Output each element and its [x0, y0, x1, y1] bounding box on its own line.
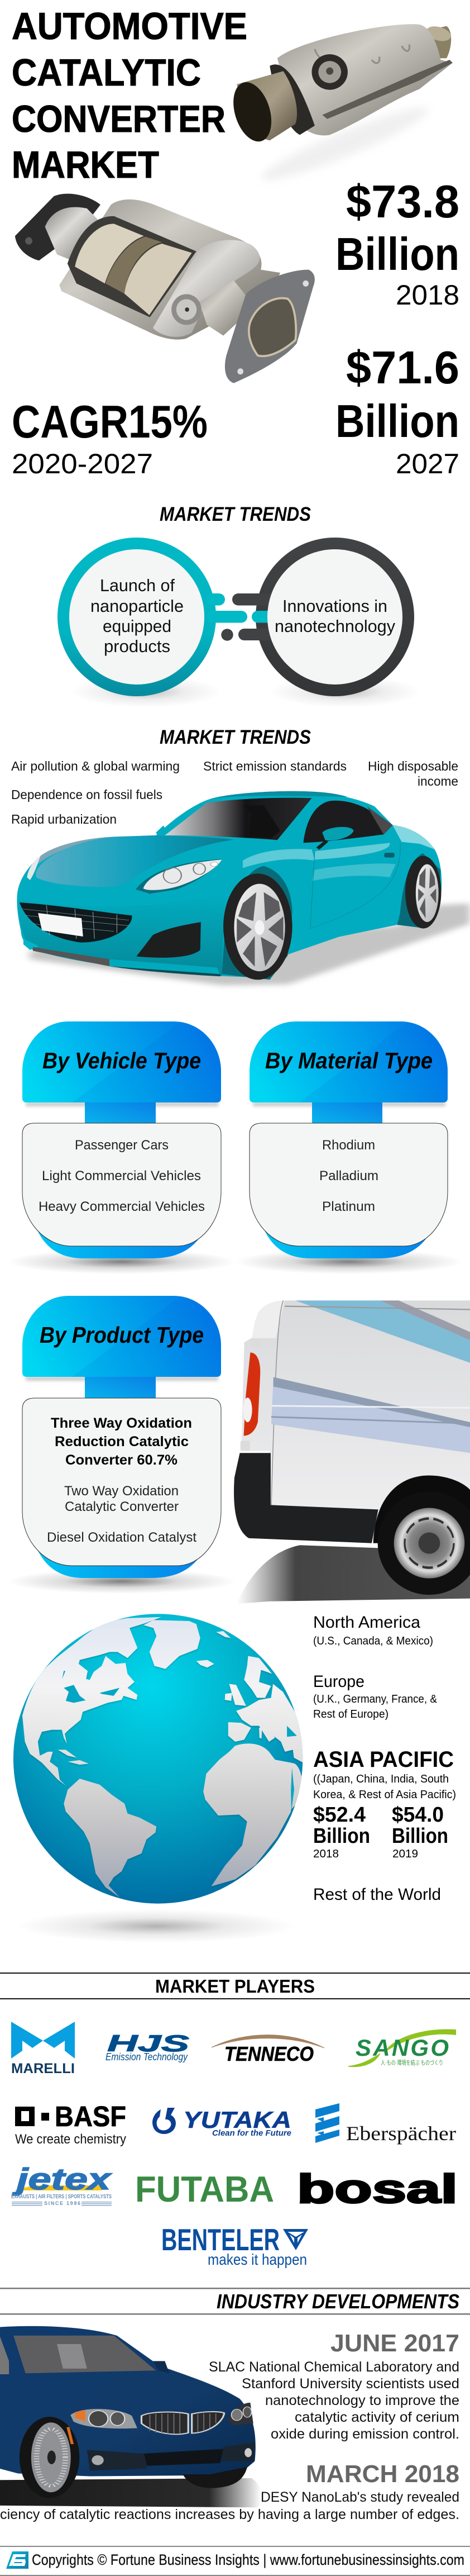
legend: asia pacific: Billion: [392, 1824, 448, 1848]
text: June 2017 development: oxide during emission control.: [271, 2426, 459, 2442]
list: vehicle types: Passenger Cars: [75, 1138, 169, 1153]
legend: asia pacific: 2019: [392, 1848, 418, 1860]
image: catalytic converter, top right: [227, 24, 453, 190]
list: drivers: Strict emission standards: [203, 759, 347, 773]
list: drivers: [11, 759, 458, 826]
logo: Futaba: FUTABA: [135, 2169, 274, 2209]
logo: BASF: BASF: [55, 2100, 126, 2132]
logo: Benteler: [161, 2222, 308, 2268]
text: June 2017 development: nanotechnology to improve the: [265, 2393, 459, 2408]
stat: 2027 market size: [335, 341, 459, 479]
list: other products: [47, 1484, 196, 1545]
logo: HJS: Emission Technology: [105, 2051, 188, 2062]
logo: BASF: We create chemistry: [15, 2132, 126, 2147]
legend: asia pacific: Korea, & Rest of Asia Pacific): [313, 1789, 456, 1801]
legend: asia pacific: ((Japan, China, India, South: [313, 1773, 449, 1785]
text: June 2017 development: SLAC National Chemical Laboratory and: [209, 2359, 459, 2375]
text: left circle: products: [104, 636, 170, 656]
stat: CAGR: 2020-2027: [12, 448, 153, 479]
list: drivers: Dependence on fossil fuels: [11, 787, 162, 802]
list: materials: Palladium: [319, 1168, 378, 1184]
text: leading product share: Three Way Oxidation: [51, 1415, 192, 1431]
legend: asia pacific: Billion: [313, 1824, 370, 1848]
legend: europe: Europe: [313, 1672, 365, 1691]
stat: 2027 market size: $71.6: [346, 341, 459, 393]
text: March 2018 development: DESY NanoLab's study revealed: [261, 2489, 459, 2505]
list: materials: Rhodium: [322, 1138, 375, 1153]
legend: asia pacific: 2018: [313, 1848, 339, 1860]
panel: by product type: [7, 1296, 236, 1594]
text: June 2017 development: Stanford University scientists used: [242, 2376, 459, 2392]
legend: north america: [313, 1613, 433, 1647]
logo: Benteler: BENTELER: [161, 2222, 280, 2257]
stat: CAGR: [12, 396, 208, 479]
logo: Jetex: [11, 2162, 112, 2206]
legend: europe: [313, 1672, 438, 1720]
text: June 2017 development: catalytic activity of cerium: [295, 2409, 459, 2425]
logo: Eberspacher: [315, 2103, 456, 2145]
icon: Fortune Business Insights mark: [6, 2551, 28, 2569]
text: leading product share: Converter 60.7%: [65, 1452, 178, 1468]
logo: Bosal: bosal: [297, 2167, 458, 2212]
illustration: globe: [13, 1614, 305, 1943]
legend: europe: Rest of Europe): [313, 1708, 389, 1720]
text: March 2018 development: MARCH 2018: [306, 2460, 459, 2488]
list: drivers: Rapid urbanization: [11, 812, 117, 826]
title: MARKET: [12, 144, 159, 186]
text: right circle: Innovations in: [282, 596, 387, 616]
logo: Benteler: makes it happen: [208, 2251, 307, 2268]
logo: Jetex: jetex: [12, 2162, 112, 2196]
text: June 2017 development: JUNE 2017: [330, 2330, 459, 2357]
legend: asia pacific: $54.0: [392, 1803, 444, 1827]
text: right circle: nanotechnology: [275, 616, 395, 636]
text: March 2018 development: [0, 2460, 459, 2522]
text: June 2017 development: [209, 2330, 459, 2442]
logo: Tenneco: TENNECO: [224, 2042, 314, 2065]
logo: HJS: HJS: [107, 2030, 189, 2056]
list: materials: [319, 1138, 378, 1214]
heading: market trends: MARKET TRENDS: [160, 503, 311, 525]
image: opened catalytic converter: [15, 194, 315, 383]
list: vehicle types: [39, 1138, 205, 1214]
legend: asia pacific: [313, 1747, 456, 1860]
logo: Jetex: SINCE 1986: [44, 2200, 80, 2206]
text: right circle: [275, 596, 395, 636]
logo: Eberspacher: Eberspächer: [346, 2122, 456, 2145]
text: left circle: nanoparticle: [90, 596, 184, 616]
text: left circle: equipped: [103, 616, 171, 636]
heading: market trends drivers: MARKET TRENDS: [160, 726, 311, 748]
stat: CAGR: CAGR15%: [12, 396, 208, 448]
trend circles: [57, 538, 420, 707]
list: drivers: income: [418, 774, 458, 788]
logo: Sango: [348, 2030, 456, 2066]
heading: material type: By Material Type: [265, 1048, 433, 1073]
logo: BASF: [15, 2100, 126, 2147]
text: March 2018 development: ciency of catalytic reactions increases by having a large number of edges.: [0, 2507, 459, 2522]
list: other products: Catalytic Converter: [65, 1499, 179, 1514]
illustration: teal sports car: [17, 791, 470, 985]
logo: Sango: 人·もの·環境を結ぶ ものづくり: [381, 2059, 443, 2066]
logo: HJS: [105, 2030, 189, 2062]
title: CONVERTER: [12, 98, 226, 140]
legend: north america: North America: [313, 1613, 420, 1632]
list: materials: Platinum: [322, 1199, 375, 1214]
stat: 2018 market size: [335, 175, 459, 311]
panel: by material type: [234, 1021, 463, 1274]
footer: [0, 2546, 470, 2576]
panel: by vehicle type: [7, 1021, 236, 1274]
text: leading product share: Reduction Catalytic: [55, 1434, 189, 1449]
title: CATALYTIC: [12, 51, 201, 94]
heading: product type: By Product Type: [40, 1322, 204, 1348]
list: vehicle types: Light Commercial Vehicles: [42, 1168, 201, 1184]
list: other products: Diesel Oxidation Catalyst: [47, 1530, 196, 1545]
text: leading product share: [51, 1415, 192, 1468]
legend: asia pacific: ASIA PACIFIC: [313, 1747, 454, 1772]
legend: rest of the world: Rest of the World: [313, 1885, 441, 1904]
stat: 2027 market size: 2027: [396, 448, 459, 479]
legend: europe: (U.K., Germany, France, &: [313, 1693, 438, 1705]
list: other products: Two Way Oxidation: [64, 1484, 179, 1499]
legend: north america: (U.S., Canada, & Mexico): [313, 1635, 433, 1647]
logo: Sango: SANGO: [356, 2035, 449, 2061]
title: AUTOMOTIVE: [12, 5, 247, 47]
legend: asia pacific: $52.4: [313, 1803, 366, 1827]
logo: Marelli: [11, 2022, 75, 2076]
text: left circle: Launch of: [100, 576, 175, 595]
logo: Yutaka: YUTAKA: [183, 2107, 291, 2133]
list: vehicle types: Heavy Commercial Vehicles: [39, 1199, 205, 1214]
stat: 2018 market size: $73.8: [346, 175, 459, 227]
illustration: white van: [234, 1300, 470, 1604]
heading: vehicle type: By Vehicle Type: [42, 1048, 201, 1073]
logo: Marelli: MARELLI: [11, 2061, 75, 2076]
illustration: navy sedan: [0, 2326, 261, 2507]
title: [12, 5, 247, 186]
heading: market players: MARKET PLAYERS: [155, 1976, 315, 1997]
logo: Yutaka: Clean for the Future: [212, 2128, 291, 2138]
list: drivers: Air pollution & global warming: [11, 759, 180, 773]
text: left circle: [90, 576, 184, 656]
list: drivers: High disposable: [368, 759, 458, 773]
stat: 2018 market size: 2018: [396, 279, 459, 311]
logo: Yutaka: [152, 2107, 291, 2138]
logo: Tenneco: [212, 2035, 324, 2065]
logo: Jetex: EXHAUSTS | AIR FILTERS | SPORTS CATALYSTS: [11, 2194, 112, 2200]
